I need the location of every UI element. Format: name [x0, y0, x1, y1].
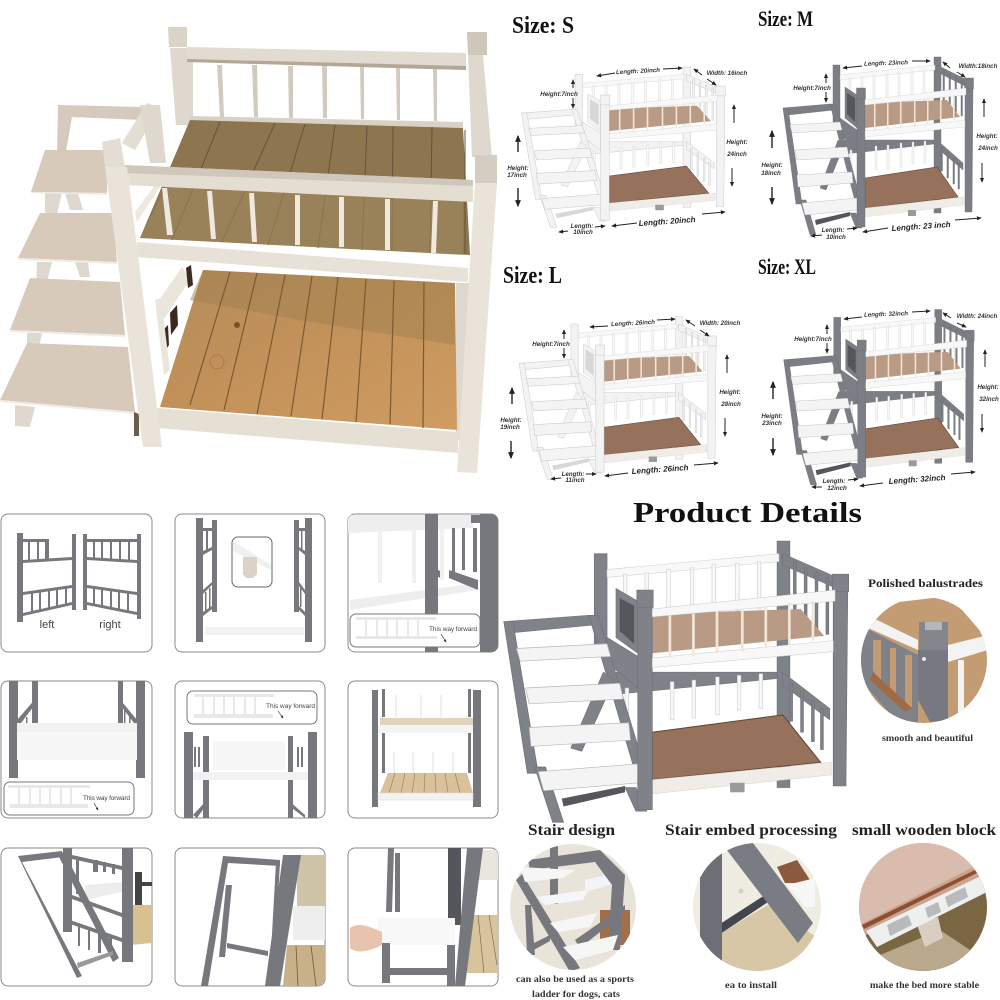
caption line 2: ladder for dogs, cats	[532, 989, 621, 999]
panel: stair frame close-up	[175, 848, 325, 986]
dimension: width: Width: 16inch	[707, 70, 747, 77]
dimension: bed height: 28inch	[720, 401, 741, 408]
dimension: stair length: Length:	[822, 227, 844, 234]
white shelf	[17, 723, 137, 732]
dimension: rail height	[793, 74, 831, 102]
side rail and balusters	[122, 103, 193, 375]
dimension: rail height: Height:7inch	[540, 91, 578, 98]
dimension: base length: Length: 20inch	[638, 215, 696, 228]
dimension: top length	[590, 319, 675, 328]
hero: wooden bunk bed with stairs	[0, 27, 497, 473]
crossbar	[227, 943, 268, 956]
stair legs	[15, 193, 90, 427]
wood floor	[380, 773, 473, 793]
dimension: top length	[843, 59, 930, 68]
heading: Size: S	[512, 13, 574, 39]
dimension: stair height: 19inch	[500, 424, 520, 431]
dimension: bed height: Height:	[977, 384, 999, 391]
frame rails	[63, 848, 133, 962]
front-right post	[457, 155, 497, 473]
heading: Size: XL	[758, 254, 816, 279]
panel: stair frame attached	[1, 848, 152, 986]
white shelves	[378, 725, 473, 733]
dimension: bed height: 24inch	[977, 145, 998, 152]
balusters white	[378, 528, 444, 583]
dimension: bed height: Height:	[719, 389, 741, 396]
dimension: width	[943, 62, 998, 77]
dimension: rail height	[540, 80, 578, 108]
heading: Stair design	[528, 822, 615, 839]
posts	[184, 732, 317, 818]
upper deck strip	[380, 718, 473, 725]
caption: smooth and beautiful	[882, 733, 974, 743]
dimension: stair length	[811, 227, 857, 241]
panel: shelf inserted between frames	[1, 681, 152, 818]
dimension: stair length	[559, 223, 605, 236]
white rails	[348, 515, 478, 610]
dimension: top length: Length: 32inch	[864, 310, 908, 319]
title: Product Details: Product Details	[633, 497, 862, 529]
lower deck planks	[160, 270, 457, 430]
dimension: stair length: 10inch	[826, 234, 846, 241]
heading: Stair embed processing	[665, 822, 837, 839]
stair frame	[18, 851, 82, 978]
side rails	[18, 702, 136, 723]
dimension: stair length: Length:	[571, 223, 593, 230]
size XL diagram	[758, 254, 999, 492]
dimension: bed height: Height:	[726, 139, 748, 146]
heading: Polished balustrades	[868, 576, 983, 590]
inset: this way forward: This way forward	[266, 703, 315, 710]
stair frame	[201, 856, 280, 986]
dimension: stair length	[551, 471, 596, 484]
dimension: rail height: Height:7inch	[793, 85, 831, 92]
upper deck planks	[140, 120, 470, 255]
dimension: stair height: Height:	[500, 417, 522, 424]
dimension: stair height: 18inch	[761, 170, 781, 177]
dimension: bed height: 24inch	[726, 151, 747, 158]
dimension: stair height	[500, 388, 522, 458]
bed illustration	[522, 67, 725, 227]
inset: this way forward	[4, 782, 134, 815]
hanging struts	[386, 848, 400, 912]
background room	[297, 855, 325, 906]
dimension: base length	[860, 472, 975, 486]
dimension: bed height	[977, 350, 999, 432]
dimension: bed height	[976, 99, 998, 182]
dimension: bed height	[726, 105, 748, 186]
lower side rails	[193, 804, 305, 818]
bed illustration	[784, 310, 974, 485]
short strut	[219, 885, 232, 957]
front lower rail	[137, 242, 468, 282]
callout: polished balustrades	[860, 576, 988, 743]
dimension: width	[694, 69, 747, 85]
front top rail	[125, 165, 473, 202]
dimension: base length	[863, 218, 981, 233]
left frame side	[196, 518, 217, 642]
dimension: stair height: 17inch	[507, 172, 527, 179]
dimension: stair height: Height:	[507, 165, 529, 172]
base rail	[157, 408, 458, 453]
dimension: top length: Length: 23inch	[864, 59, 908, 68]
dark posts and balusters	[425, 514, 498, 652]
white base rail	[378, 793, 473, 800]
label left: left	[40, 619, 54, 631]
bed illustration	[519, 317, 717, 479]
dimension: bed height	[719, 355, 741, 436]
heading: small wooden block	[852, 822, 996, 839]
white step	[448, 918, 455, 925]
dimension: width: Width:18inch	[959, 63, 998, 70]
background wood	[466, 915, 498, 973]
panel: frames left and right	[1, 514, 152, 652]
caption line 1: can also be used as a sports	[516, 974, 635, 984]
caption: make the bed more stable	[870, 980, 979, 990]
detail circle	[860, 596, 988, 725]
panel: second rail assembly	[175, 681, 325, 818]
dimension: stair height	[761, 131, 783, 204]
big post	[455, 848, 483, 986]
dimension: width: Width: 24inch	[957, 313, 997, 320]
dimension: stair height: Height:	[761, 413, 783, 420]
heading: Size: M	[758, 6, 813, 31]
frame posts	[372, 689, 481, 807]
hand	[350, 925, 382, 951]
dimension: width	[686, 320, 740, 336]
size M diagram	[758, 6, 998, 241]
dimension: rail height	[532, 330, 570, 358]
dimension: rail height: Height:7inch	[532, 341, 570, 348]
dimension: stair height: Height:	[761, 162, 783, 169]
dimension: rail height	[794, 325, 832, 353]
stair back frame	[57, 105, 143, 157]
panel: fitting a step by hand	[348, 848, 498, 986]
background wood and rail	[133, 905, 152, 945]
step support	[382, 943, 455, 986]
back-right lower post	[456, 283, 470, 440]
dimension: stair length: 12inch	[827, 485, 847, 492]
product bed illustration	[504, 541, 849, 822]
back rail and balusters	[187, 47, 466, 128]
back posts	[168, 27, 492, 157]
dimension: stair height	[507, 136, 529, 206]
dimension: bed height: 32inch	[979, 396, 999, 403]
dimension: stair height	[761, 382, 783, 455]
detail circle	[859, 843, 990, 971]
dimension: stair length: Length:	[562, 471, 584, 478]
callout: stair design	[510, 822, 636, 999]
dimension: width	[943, 313, 997, 327]
right frame	[83, 534, 141, 619]
dimension: top length	[844, 310, 930, 319]
diagonal strut	[58, 852, 119, 962]
front balusters	[162, 188, 438, 253]
dimension: base length: Length: 23 inch	[891, 220, 951, 233]
stair treads	[0, 150, 135, 414]
dimension: top length: Length: 26inch	[611, 319, 655, 328]
panel: assembled bed with wood floor	[348, 681, 498, 818]
detail circle	[510, 844, 636, 972]
dimension: base length	[605, 463, 718, 476]
bed illustration	[783, 57, 974, 235]
inset: this way forward: This way forward	[83, 795, 130, 802]
white shelf	[193, 772, 308, 780]
faint floor board	[205, 627, 304, 635]
inset: this way forward	[350, 614, 480, 647]
caption: ea to install	[725, 980, 778, 990]
posts	[9, 681, 145, 778]
dimension: width: Width: 20inch	[700, 320, 740, 327]
rail balusters	[393, 695, 454, 773]
dimension: stair length: 10inch	[573, 229, 593, 236]
size L diagram	[500, 263, 741, 484]
dimension: stair length: 11inch	[565, 477, 585, 484]
dimension: top length: Length: 20inch	[616, 67, 660, 76]
callout: stair embed processing	[665, 822, 837, 990]
stair shadow	[134, 412, 139, 436]
panel: frames standing apart with block inset	[175, 514, 325, 652]
inset: this way forward: This way forward	[429, 626, 477, 633]
dimension: stair height: 23inch	[761, 420, 782, 427]
dimension: base length: Length: 26inch	[631, 463, 689, 476]
dimension: top length	[597, 67, 682, 76]
heading: Size: L	[503, 263, 562, 289]
label right: right	[99, 619, 121, 631]
dimension: stair length: Length:	[823, 478, 845, 485]
dimension: bed height: Height:	[976, 133, 998, 140]
dimension: rail height: Height:7inch	[794, 336, 832, 343]
dimension: stair length	[812, 478, 858, 492]
size S diagram	[507, 13, 748, 236]
dimension: base length	[612, 212, 725, 228]
big post	[265, 855, 301, 986]
detail circle	[693, 843, 821, 971]
inset: wooden block	[232, 537, 272, 587]
crossbar	[77, 951, 113, 968]
panel: rail fitted in frame with direction inset	[348, 514, 498, 652]
right frame side	[294, 518, 312, 642]
left frame	[17, 533, 76, 622]
dimension: base length: Length: 32inch	[888, 473, 946, 486]
callout: small wooden block	[852, 822, 996, 990]
front-left post	[102, 138, 162, 447]
balusters	[194, 747, 303, 767]
dark rear frame	[448, 848, 461, 925]
